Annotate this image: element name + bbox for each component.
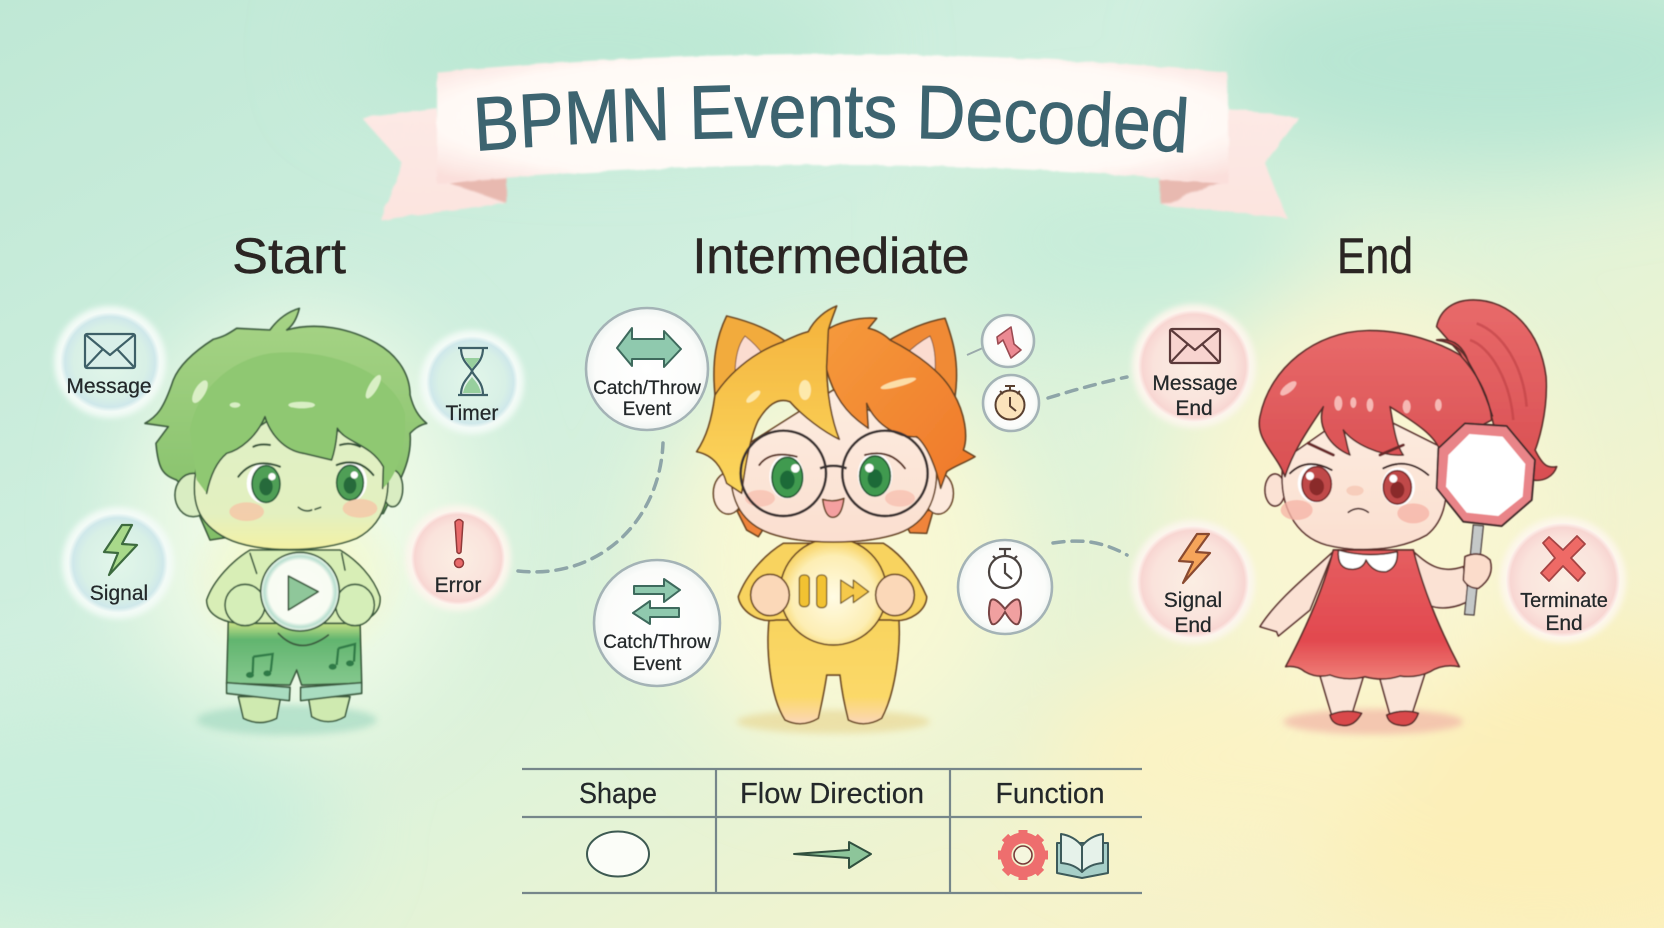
event: catch/throw opposing arrows: Event bbox=[633, 654, 682, 675]
event: message end bbox=[1132, 304, 1256, 428]
right arm bbox=[1413, 552, 1470, 608]
character: green start mascot bbox=[145, 308, 427, 735]
left arm bbox=[1260, 552, 1333, 636]
heading: Intermediate: Intermediate bbox=[692, 228, 970, 284]
event: terminate end: Terminate bbox=[1520, 590, 1608, 612]
side locks bbox=[737, 510, 773, 537]
eyes bbox=[1298, 464, 1332, 503]
cheeks and mouth bbox=[229, 502, 264, 521]
event: catch/throw double arrow: Catch/Throw bbox=[593, 378, 701, 399]
title text: BPMN Events Decoded bbox=[477, 85, 1187, 153]
event: signal bbox=[62, 507, 174, 619]
icon: flow arrow bbox=[794, 842, 871, 868]
cheeks and mouth bbox=[745, 490, 775, 507]
event: catch/throw double arrow: Event bbox=[623, 399, 672, 420]
event: terminate end: End bbox=[1545, 612, 1583, 635]
event: timer bbox=[420, 330, 524, 434]
event: link bubble bbox=[967, 315, 1034, 367]
connector: error to catch/throw bbox=[518, 443, 663, 572]
eyes bbox=[769, 455, 804, 499]
event: catch/throw opposing arrows bbox=[594, 560, 720, 686]
overalls bbox=[227, 620, 362, 685]
ponytail bbox=[1437, 300, 1557, 480]
hands bbox=[751, 574, 789, 616]
icon: gear bbox=[998, 830, 1048, 880]
eyes bbox=[247, 463, 280, 503]
feet bbox=[238, 697, 350, 722]
connector: stopwatch to signal end bbox=[1053, 541, 1127, 555]
dress bbox=[1286, 550, 1459, 679]
pause-forward button bbox=[780, 538, 887, 645]
glasses bbox=[741, 431, 928, 516]
event: stopwatch and bow bubble bbox=[958, 540, 1052, 634]
event: message bbox=[54, 306, 166, 418]
character: orange intermediate mascot bbox=[697, 306, 975, 733]
panel: end events bbox=[1131, 300, 1626, 734]
stop sign pole bbox=[1465, 525, 1483, 615]
bangs edge line bbox=[207, 417, 383, 493]
cat ears bbox=[714, 316, 792, 395]
heading: End: End bbox=[1337, 228, 1413, 284]
legs and shoes bbox=[1319, 673, 1425, 717]
table header: function: Function bbox=[996, 778, 1104, 810]
event: error: Error bbox=[435, 574, 481, 597]
legend table bbox=[522, 769, 1142, 893]
play button bbox=[261, 552, 339, 631]
music notes bbox=[253, 654, 273, 673]
event: message: Message bbox=[66, 375, 152, 398]
cheeks and mouth bbox=[1281, 500, 1313, 520]
event: signal end: Signal bbox=[1164, 589, 1222, 612]
event: signal end bbox=[1131, 520, 1255, 644]
orange hair half bbox=[827, 318, 975, 488]
event: catch/throw double arrow bbox=[586, 308, 708, 430]
icon: ellipse shape bbox=[587, 832, 649, 876]
hair tie bbox=[1437, 340, 1468, 362]
event: message end: End bbox=[1175, 397, 1213, 420]
yellow hair half bbox=[697, 306, 839, 493]
hand bbox=[1463, 554, 1491, 588]
heading: Start: Start bbox=[232, 228, 346, 284]
panel: intermediate events bbox=[586, 306, 1052, 733]
event: signal: Signal bbox=[90, 582, 148, 605]
table header: shape: Shape bbox=[579, 778, 657, 810]
face bbox=[731, 390, 937, 542]
ribbon tails bbox=[362, 108, 1299, 220]
connector: timer to message end bbox=[1048, 377, 1127, 398]
stop sign bbox=[1437, 423, 1535, 526]
event: message end: Message bbox=[1152, 372, 1238, 395]
character: red end mascot bbox=[1259, 300, 1557, 734]
bangs fill bbox=[190, 352, 405, 493]
event: error bbox=[405, 505, 511, 611]
collar bbox=[1338, 550, 1397, 572]
back hair bbox=[145, 308, 427, 540]
event: catch/throw opposing arrows: Catch/Throw bbox=[603, 632, 711, 653]
ribbon body bbox=[437, 54, 1229, 184]
table header: flow direction: Flow Direction bbox=[740, 778, 924, 810]
hair highlights bbox=[1278, 379, 1442, 413]
legs and body bbox=[768, 613, 899, 724]
head hair with bangs bbox=[1259, 331, 1492, 477]
face bbox=[194, 407, 388, 550]
hair highlights bbox=[189, 373, 384, 408]
icon: book bbox=[1057, 834, 1108, 878]
title banner bbox=[362, 52, 1300, 222]
event: timer bubble bbox=[983, 375, 1039, 431]
face bbox=[1282, 407, 1446, 549]
arms bbox=[738, 543, 927, 621]
event: terminate end bbox=[1500, 517, 1626, 643]
ear bbox=[1265, 474, 1285, 506]
panel: start events bbox=[54, 306, 524, 735]
hair highlights bbox=[745, 375, 917, 405]
event: timer: Timer bbox=[446, 402, 498, 425]
torso and arms bbox=[207, 550, 380, 623]
ears bbox=[175, 473, 212, 517]
ears bbox=[713, 473, 743, 514]
event: signal end: End bbox=[1174, 614, 1212, 637]
